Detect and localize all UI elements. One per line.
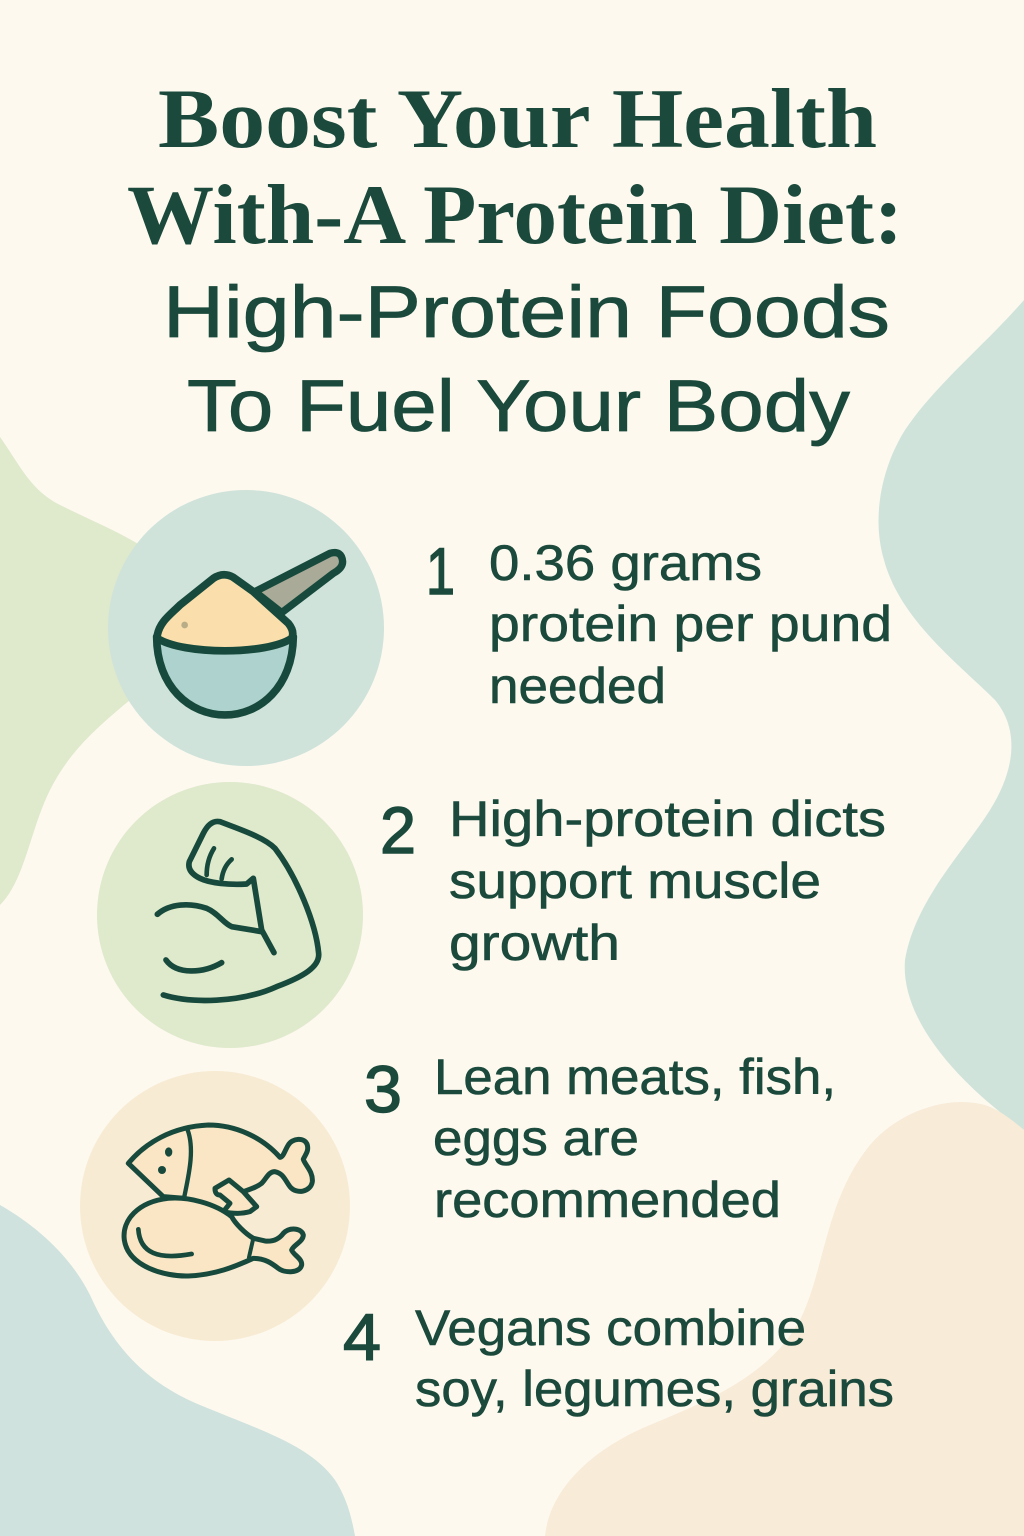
step 3 text: Lean meats, fish,: [434, 1049, 836, 1105]
panel: muscle circle: [97, 782, 363, 1048]
title: To Fuel Your Body: [187, 366, 851, 447]
step 3 text: eggs are: [433, 1110, 639, 1166]
step 2 text: support muscle: [449, 853, 821, 909]
panel: fish and chicken circle: [80, 1071, 350, 1341]
step 1 text: [426, 534, 892, 714]
step 2 text: [380, 791, 886, 971]
icon: flexed arm: [157, 821, 319, 1000]
step 1 text: needed: [489, 658, 666, 714]
step 1 text: 0.36 grams: [489, 535, 762, 591]
step 2 text: growth: [449, 915, 620, 971]
step 3 text: [364, 1049, 836, 1228]
step 1 text: 1: [426, 534, 455, 608]
title: With-A Protein Diet:: [127, 168, 903, 262]
title: [127, 72, 903, 447]
step 4 text: 4: [343, 1300, 381, 1374]
step 3 text: recommended: [434, 1172, 781, 1228]
step 4 text: soy, legumes, grains: [415, 1361, 894, 1417]
step 1 text: protein per pund: [489, 596, 892, 652]
icon: protein scoop: [157, 553, 343, 715]
title: High-Protein Foods: [163, 272, 890, 353]
step 4 text: [343, 1300, 894, 1417]
step 4 text: Vegans combine: [415, 1300, 806, 1356]
step 3 text: 3: [364, 1052, 402, 1126]
panel: protein scoop circle: [108, 490, 384, 766]
icon: fish and chicken leg: [124, 1125, 312, 1276]
step 2 text: 2: [380, 793, 416, 867]
step 2 text: High-protein dicts: [449, 791, 886, 847]
title: Boost Your Health: [158, 72, 877, 166]
